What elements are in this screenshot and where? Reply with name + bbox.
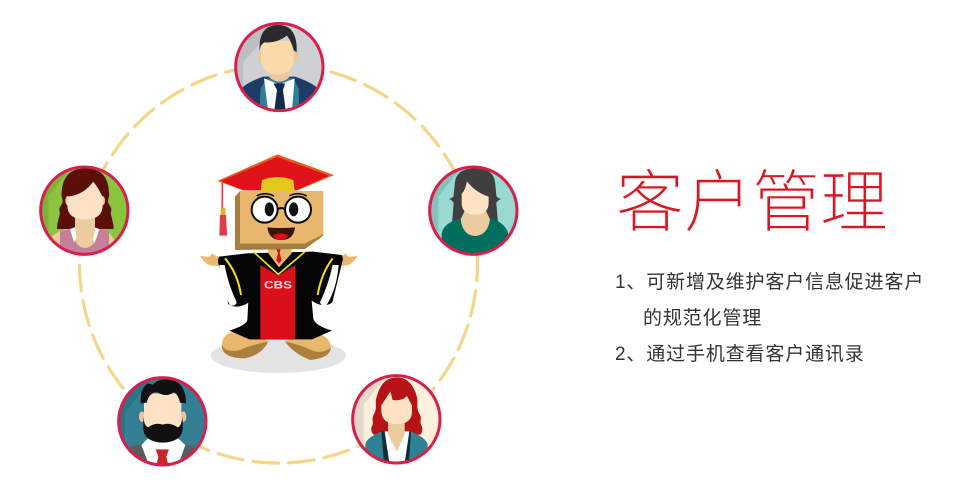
avatar: red-haired woman <box>351 374 442 464</box>
mascot shadow <box>211 338 346 373</box>
list item 1: 1、可新增及维护客户信息促进客户 <box>615 272 924 293</box>
mascot mouth <box>267 227 295 240</box>
mascot box head <box>235 191 323 250</box>
mascot glasses and eyes <box>252 197 278 223</box>
dashed ring connecting customers <box>80 65 478 463</box>
mascot gown <box>218 248 343 339</box>
mascot mortarboard <box>217 154 334 236</box>
list item 1 continuation: 的规范化管理 <box>643 308 762 329</box>
avatar: woman with curly hair on green <box>39 166 130 256</box>
avatar: bearded man on blue <box>117 376 208 466</box>
feature list <box>615 272 924 365</box>
list item 2: 2、通过手机查看客户通讯录 <box>615 344 865 365</box>
mascot hands <box>200 254 221 266</box>
mascot feet <box>222 332 331 360</box>
avatar: woman with dark hair on teal <box>428 166 518 256</box>
avatar: man in navy suit <box>234 22 324 112</box>
gown logo: CBS <box>264 280 293 292</box>
title: 客户管理 <box>616 165 888 241</box>
mascot: graduate with CBS box head <box>200 154 358 373</box>
